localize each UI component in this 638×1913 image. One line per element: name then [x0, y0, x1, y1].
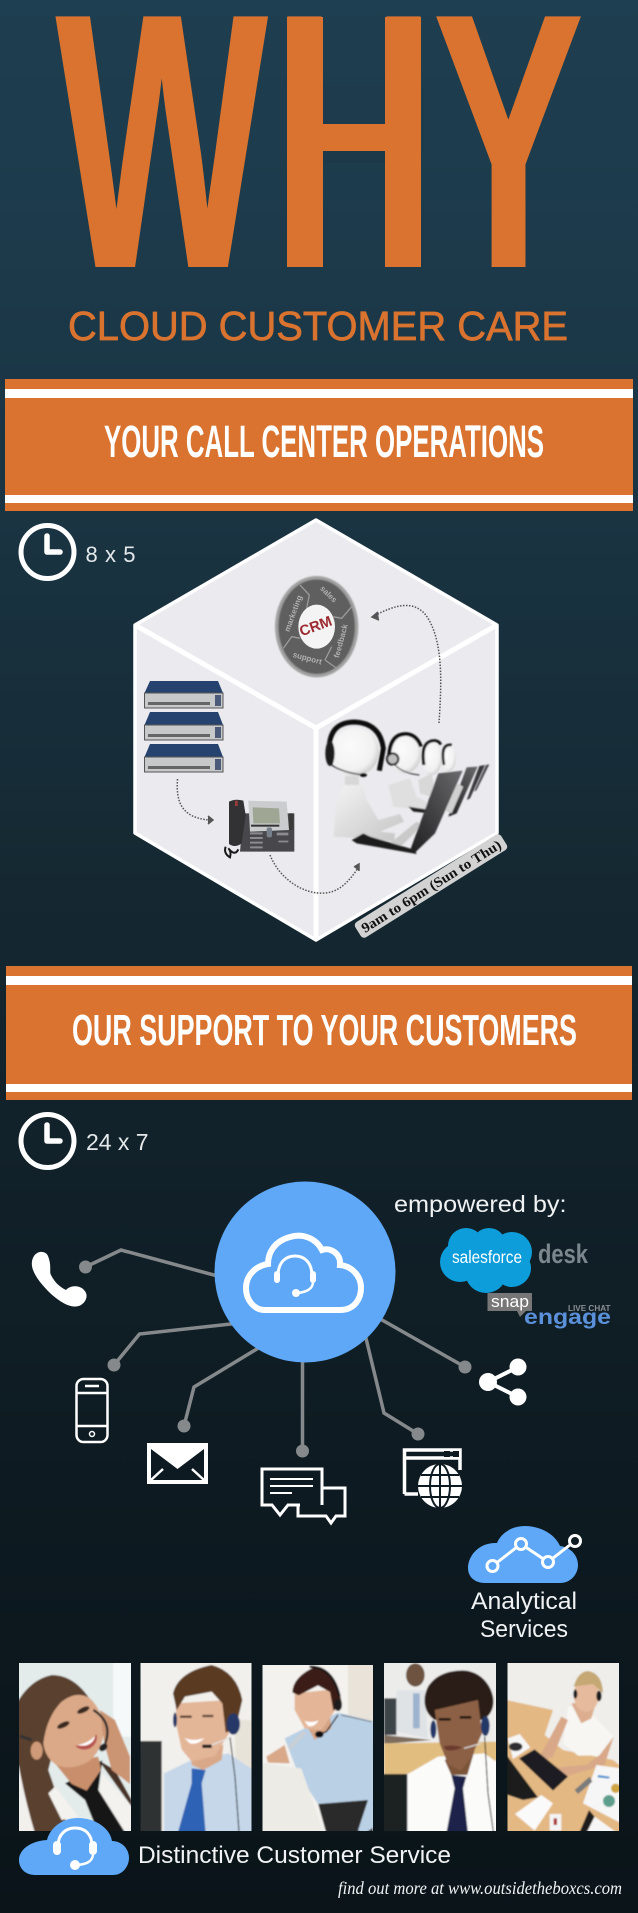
icon: telephone handset — [32, 1252, 87, 1307]
icon: central cloud support circle — [214, 1182, 396, 1362]
icon: share — [479, 1358, 526, 1406]
icon: clock 24x7 — [21, 1114, 74, 1168]
text: analytical services — [471, 1588, 577, 1643]
icon: CRM wheel: marketing — [283, 594, 304, 633]
icon: web globe — [404, 1450, 462, 1508]
photo: agent 1 — [15, 1660, 135, 1833]
icon: clock 8x5 — [21, 526, 74, 578]
logo: snapengage: snap — [491, 1292, 529, 1311]
photo: agent 3 — [262, 1665, 373, 1831]
text: empowered by: empowered by: — [394, 1191, 566, 1217]
icon: analytics cloud — [468, 1526, 580, 1583]
photo: agent 5 — [503, 1660, 623, 1833]
text: analytical services: Analytical — [471, 1588, 577, 1615]
connector lines — [79, 1250, 472, 1458]
banner: your call center operations — [5, 379, 633, 511]
photo: agent 4 — [381, 1660, 500, 1833]
icon: chat bubbles — [262, 1469, 345, 1523]
icon: CRM wheel: CRM — [298, 614, 334, 640]
icon: white agents with laptops — [325, 722, 489, 854]
panel: call center cube — [135, 520, 509, 940]
label: 8 x 5: 8 x 5 — [86, 542, 136, 567]
subtitle: CLOUD CUSTOMER CARE — [68, 303, 568, 349]
icon: CRM wheel: feedback — [332, 623, 350, 659]
arrow: agents to CRM — [372, 605, 441, 723]
logo: snapengage — [488, 1292, 611, 1329]
photo: agent 2 — [140, 1663, 252, 1831]
logo: salesforce: salesforce — [452, 1247, 522, 1267]
icon: mobile phone — [76, 1379, 108, 1442]
text: distinctive customer service: Distinctive Customer Service — [138, 1842, 451, 1869]
logo: snapengage: LIVE CHAT — [568, 1304, 611, 1313]
icon: CRM wheel: support — [292, 650, 323, 667]
icon: CRM wheel — [275, 576, 358, 677]
icon: envelope — [147, 1443, 208, 1484]
icon: headset cloud — [19, 1818, 129, 1875]
arrow: servers to phone — [177, 779, 213, 824]
logo: snapengage: engage — [524, 1306, 611, 1329]
icon: CRM wheel: sales — [318, 584, 339, 605]
icon: server stack — [144, 681, 223, 772]
banner: our support to your customers — [6, 966, 632, 1100]
callout: working hours tag: 9am to 6pm (Sun to Thu) — [359, 838, 505, 937]
label: 24 x 7: 24 x 7 — [86, 1129, 148, 1155]
logo: desk: desk — [538, 1239, 589, 1269]
text: website link: find out more at www.outsidetheboxcs.com — [338, 1878, 622, 1898]
icon: desk phone — [225, 800, 294, 857]
logo: salesforce — [440, 1228, 532, 1293]
arrow: phone to agents — [270, 855, 359, 893]
text: analytical services: Services — [480, 1616, 568, 1643]
